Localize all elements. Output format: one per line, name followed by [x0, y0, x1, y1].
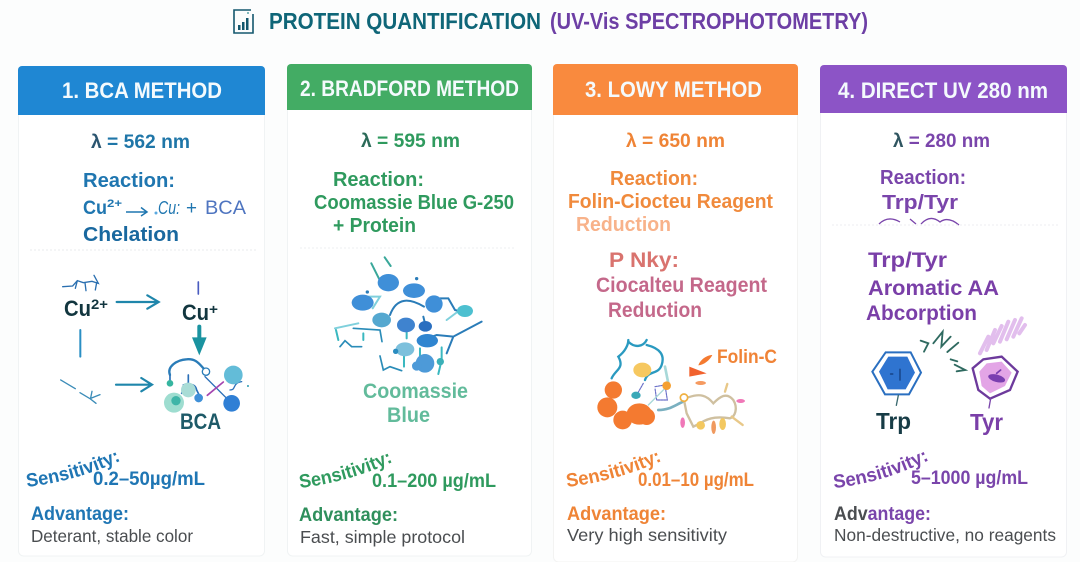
diagram: BCA reaction: 2+: [91, 296, 108, 312]
header: Direct UV: [820, 65, 1067, 113]
diagram: BCA reaction: Cu: [182, 300, 209, 325]
reaction text: Cu:: [158, 198, 180, 218]
header: BCA method: 1. BCA METHOD: [62, 78, 222, 103]
sensitivity: 0.2–50µg/mL: [93, 469, 205, 490]
diagram: Coomassie blue complex: [335, 257, 482, 427]
diagram: Folin reagent and protein: [597, 340, 777, 434]
sensitivity: [26, 452, 205, 490]
icon: bar chart: [234, 10, 253, 33]
advantage: Deterant, stable color: [31, 526, 193, 546]
reaction text: + Protein: [333, 215, 416, 237]
wavelength: λ = 562 nm: [91, 132, 190, 153]
header: Lowry method: [553, 64, 798, 115]
advantage: Advantage:: [299, 505, 398, 526]
reaction text: Reaction:: [83, 170, 175, 192]
advantage: [567, 504, 727, 545]
secondary text: Reduction: [608, 299, 702, 322]
panel: Lowry method: [553, 64, 798, 562]
heading: main title: PROTEIN QUANTIFICATION: [269, 8, 541, 34]
sensitivity: [834, 452, 1028, 489]
diagram: Folin reagent and protein: Folin-C: [717, 347, 777, 368]
diagram: Trp and Tyr rings: [872, 318, 1025, 435]
panel: Direct UV 280 nm: [820, 65, 1067, 558]
reaction text: Reduction: [576, 214, 671, 236]
reaction text: Reaction:: [610, 168, 698, 190]
sensitivity: [566, 452, 754, 491]
secondary text: [866, 249, 999, 325]
panel: BCA method: [18, 66, 265, 556]
secondary text: Aromatic AA: [868, 277, 999, 300]
advantage: Non-destructive, no reagents: [834, 525, 1056, 545]
reaction text: Chelation: [83, 224, 179, 246]
diagram: BCA reaction: Cu: [64, 296, 91, 321]
advantage: [834, 504, 1056, 545]
header: Direct UV: 4. DIRECT UV 280 nm: [838, 78, 1048, 103]
reaction text: +: [186, 198, 197, 219]
reaction text: [879, 167, 966, 225]
advantage: [299, 505, 465, 547]
sensitivity: Sensitivity:: [300, 454, 392, 488]
heading: subtitle: (UV-Vis SPECTROPHOTOMETRY): [550, 8, 868, 34]
diagram: BCA reaction: +: [209, 301, 218, 317]
reaction text: Trp/Tyr: [882, 192, 958, 214]
wavelength: λ = 280 nm: [893, 131, 990, 152]
reaction text: [314, 169, 514, 237]
secondary text: [596, 249, 767, 322]
diagram: BCA reaction: BCA: [180, 409, 221, 434]
sensitivity: 0.1–200 µg/mL: [372, 471, 496, 492]
sensitivity: Sensitivity:: [26, 452, 120, 486]
secondary text: P Nky:: [609, 249, 679, 272]
header: Bradford method: [287, 64, 532, 110]
reaction text: 2+: [107, 198, 122, 210]
secondary text: Abcorption: [866, 302, 977, 325]
header: BCA method: [18, 66, 265, 115]
reaction text: [568, 168, 773, 236]
reaction text: Reaction:: [333, 169, 424, 191]
reaction text: Cu: [83, 198, 107, 219]
advantage: Fast, simple protocol: [300, 527, 465, 547]
panel: Bradford method: [287, 64, 532, 556]
advantage: Very high sensitivity: [567, 525, 727, 545]
header: Lowry method: 3. LOWY METHOD: [585, 77, 762, 102]
diagram: Trp and Tyr rings: Tyr: [970, 409, 1003, 435]
reaction text: Folin-Ciocteu Reagent: [568, 191, 773, 213]
diagram: Coomassie blue complex: Coomassie: [363, 380, 468, 403]
sensitivity: Sensitivity:: [566, 452, 660, 486]
reaction text: [83, 170, 246, 246]
advantage: [31, 504, 193, 546]
header: Bradford method: 2. BRADFORD METHOD: [300, 76, 519, 101]
sensitivity: Sensitivity:: [834, 452, 928, 488]
reaction text: Coomassie Blue G-250: [314, 192, 514, 214]
wavelength: λ = 595 nm: [361, 131, 460, 152]
advantage: Advantage:: [834, 504, 931, 525]
advantage: Advantage:: [31, 504, 129, 525]
sensitivity: [300, 454, 496, 492]
reaction text: Reaction:: [880, 167, 966, 189]
reaction text: BCA: [205, 198, 246, 219]
secondary text: Ciocalteu Reagent: [596, 274, 767, 297]
diagram: Coomassie blue complex: Blue: [387, 404, 430, 427]
diagram: BCA reaction: [61, 275, 249, 434]
wavelength: λ = 650 nm: [626, 131, 725, 152]
title: [234, 8, 868, 34]
diagram: Trp and Tyr rings: Trp: [876, 408, 911, 434]
sensitivity: 0.01–10 µg/mL: [638, 470, 754, 491]
advantage: Advantage:: [567, 504, 666, 525]
sensitivity: 5–1000 µg/mL: [911, 468, 1028, 489]
secondary text: Trp/Tyr: [868, 249, 947, 272]
